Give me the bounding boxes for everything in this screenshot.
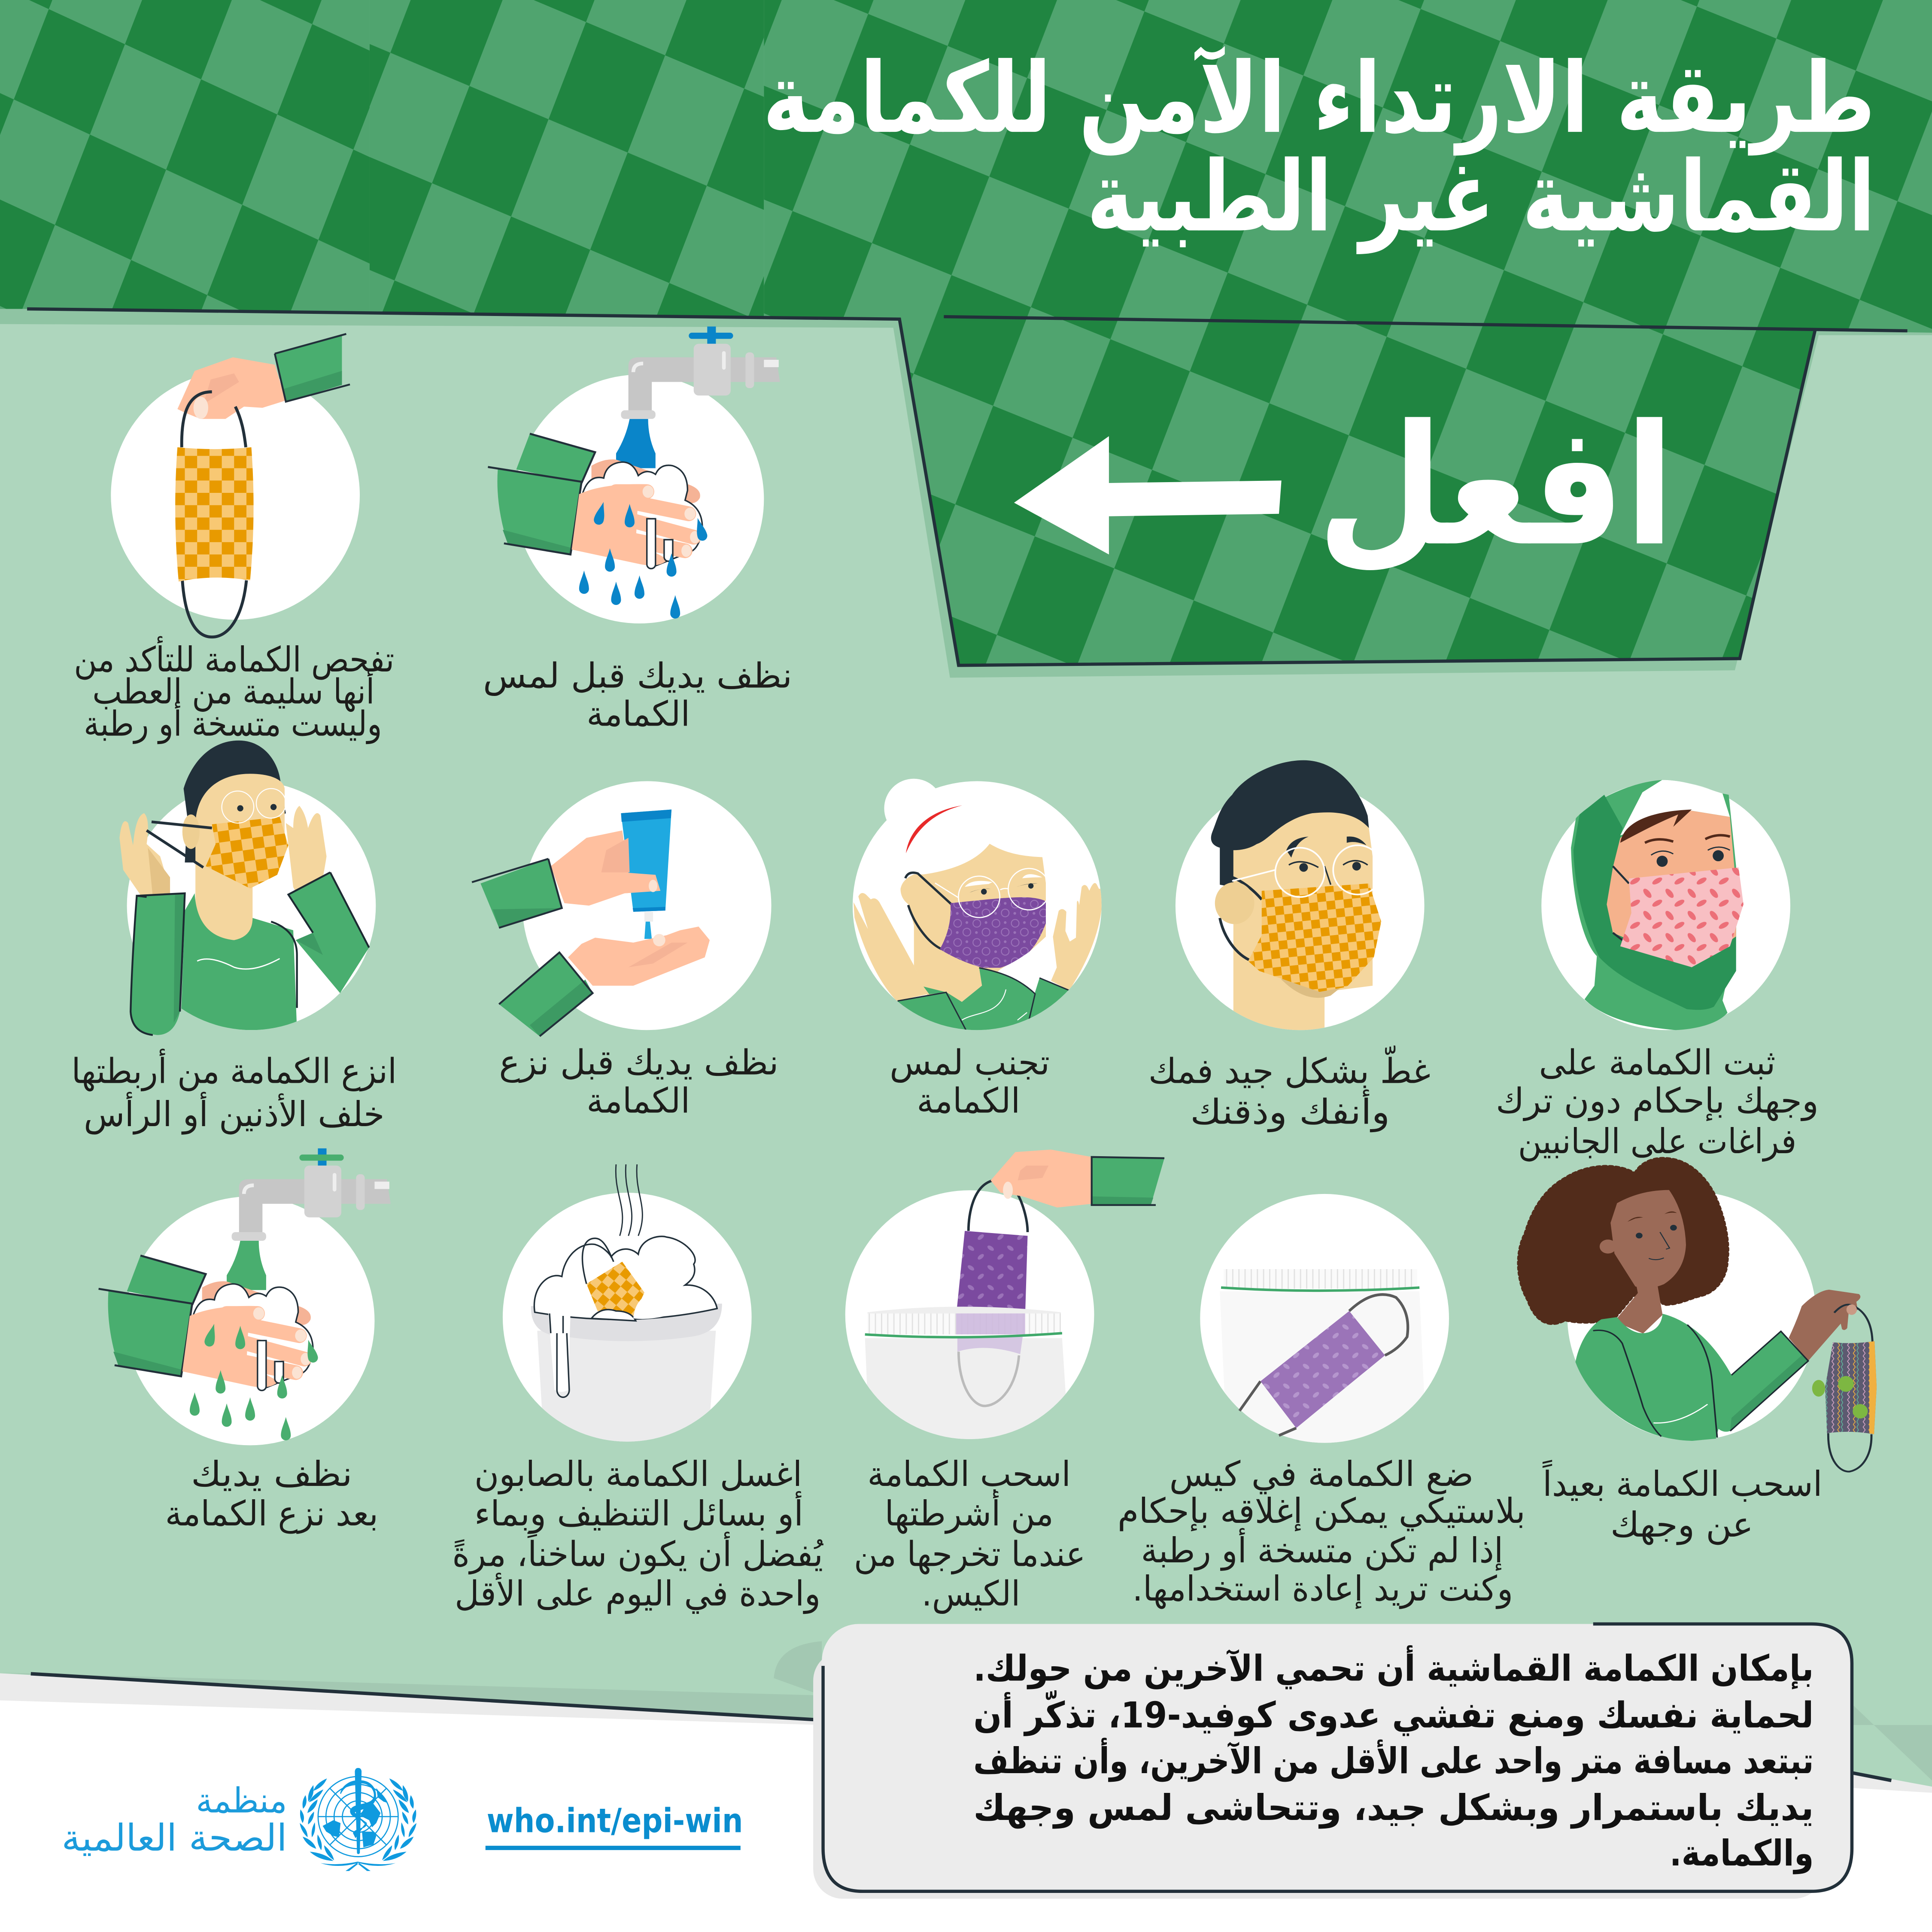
caption: أو بسائل التنظيف وبماء [474,1491,803,1534]
icon: mask inside sealed bag [1200,1194,1449,1454]
step 8: clean hands after removing [99,1148,391,1534]
caption: أنها سليمة من العطب [92,669,374,712]
caption: بعد نزع الكمامة [165,1493,378,1534]
icon: hand holding mask [111,334,360,637]
icon: woman holding contaminated mask [1519,1159,1877,1472]
caption: خلف الأذنين أو الرأس [84,1092,384,1135]
caption: يُفضل أن يكون ساخناً، مرةً [452,1530,823,1575]
caption [71,1049,397,1135]
do heading: افعل: افعل [1317,389,1674,583]
caption [165,1454,378,1534]
caption [890,1042,1050,1121]
caption: تفحص الكمامة للتأكد من [74,636,394,680]
icon: hands under running tap [488,327,780,623]
caption: من أشرطتها [885,1491,1054,1534]
caption: غطّ بشكل جيد فمك [1148,1045,1431,1091]
caption [1542,1459,1823,1545]
icon: mask lifted from plastic bag [845,1150,1164,1454]
caption [1118,1454,1525,1609]
step 9: wash mask [452,1164,823,1614]
box text [973,1645,1814,1874]
website link: who.int/epi-win [487,1802,743,1841]
title [762,42,1875,255]
caption: انزع الكمامة من أربطتها [71,1049,397,1092]
step 7: fit mask securely [1496,780,1819,1162]
footer shapes [0,1641,1932,1932]
icon: woman with purple mask [853,779,1103,1033]
caption: اغسل الكمامة بالصابون [474,1454,802,1495]
caption: الكمامة [917,1081,1020,1121]
box panel [822,1624,1852,1891]
step 11: place mask in bag [1118,1194,1525,1609]
icon: man with orange mask [1176,760,1425,1035]
icon: bucket with foam and mask [503,1164,752,1454]
caption: واحدة في اليوم على الأقل [455,1572,820,1614]
caption: الكمامة [586,693,690,734]
WHO emblem [300,1768,416,1871]
step 10: pull mask from bag [845,1150,1164,1614]
step 12: pull mask away from face [1519,1159,1877,1545]
box text: بإمكان الكمامة القماشية أن تحمي الآخرين من حولك. [973,1645,1814,1690]
caption: اسحب الكمامة [867,1454,1071,1494]
caption [854,1454,1085,1614]
caption: نظف يديك قبل نزع [499,1042,779,1083]
info box [813,1624,1852,1899]
caption [1148,1045,1431,1132]
caption: عن وجهك [1610,1504,1753,1545]
caption: بلاستيكي يمكن إغلاقه بإحكام [1118,1491,1525,1531]
caption: الكمامة [586,1081,690,1121]
step 2: wash hands before touching [483,327,792,734]
caption: عندما تخرجها من [854,1534,1085,1575]
caption [483,655,792,734]
step 4: clean hands before removing [472,781,779,1121]
caption: إذا لم تكن متسخة أو رطبة [1141,1528,1503,1571]
caption: نظف يديك قبل لمس [483,655,792,696]
caption [1496,1042,1819,1162]
caption: فراغات على الجانبين [1518,1121,1796,1162]
caption [74,636,394,744]
checkered header and ribbon [0,0,1932,690]
icon: woman in hijab with pink mask [1541,780,1790,1030]
WHO name: منظمة [196,1780,287,1821]
WHO name [61,1780,287,1860]
caption: وليست متسخة أو رطبة [84,701,382,744]
box text: لحماية نفسك ومنع تفشي عدوى كوفيد-19، تذكّر أن [973,1690,1814,1737]
step 6: cover mouth and nose [1148,760,1431,1132]
caption: وجهك بإحكام دون ترك [1496,1081,1819,1121]
header shadow band [0,308,1932,677]
caption [499,1042,779,1121]
step 1: inspect mask [74,334,394,744]
caption: الكيس. [922,1573,1020,1614]
caption [452,1454,823,1614]
caption: وأنفك وذقنك [1190,1089,1390,1132]
box border [823,1624,1852,1891]
step 5: avoid touching mask [853,779,1103,1121]
caption: وكنت تريد إعادة استخدامها. [1132,1568,1513,1609]
header outline strokes [27,309,1908,665]
caption: ضع الكمامة في كيس [1170,1454,1473,1495]
caption: نظف يديك [191,1454,352,1494]
arrow [1014,436,1282,554]
box text: يديك باستمرار وبشكل جيد، وتتحاشى لمس وجهك [973,1787,1814,1829]
caption: تجنب لمس [890,1042,1050,1083]
step 3: remove mask by ties [71,741,397,1135]
icon: man removing mask [119,741,376,1035]
box shadow [813,1651,1823,1899]
icon: hands under tap green water [99,1148,391,1445]
box text: والكمامة. [1670,1832,1814,1874]
caption: ثبت الكمامة على [1539,1042,1776,1083]
icon: hand sanitizer tube [472,781,772,1036]
caption: اسحب الكمامة بعيداً [1542,1459,1823,1504]
WHO name: الصحة العالمية [61,1817,287,1860]
